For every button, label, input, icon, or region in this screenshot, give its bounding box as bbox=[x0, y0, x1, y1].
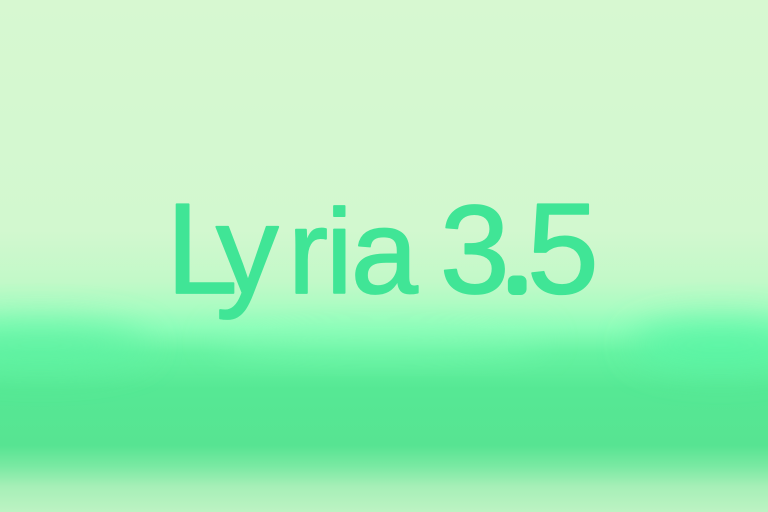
title: 5 bbox=[527, 177, 599, 321]
title: L bbox=[166, 177, 238, 321]
green glow: left bbox=[0, 323, 150, 367]
green glow: right bbox=[630, 321, 768, 369]
title: ria bbox=[288, 185, 418, 319]
light glow: centre bbox=[210, 328, 550, 352]
title: . bbox=[508, 226, 527, 304]
title: 3 bbox=[440, 181, 510, 320]
title: y bbox=[216, 181, 279, 320]
